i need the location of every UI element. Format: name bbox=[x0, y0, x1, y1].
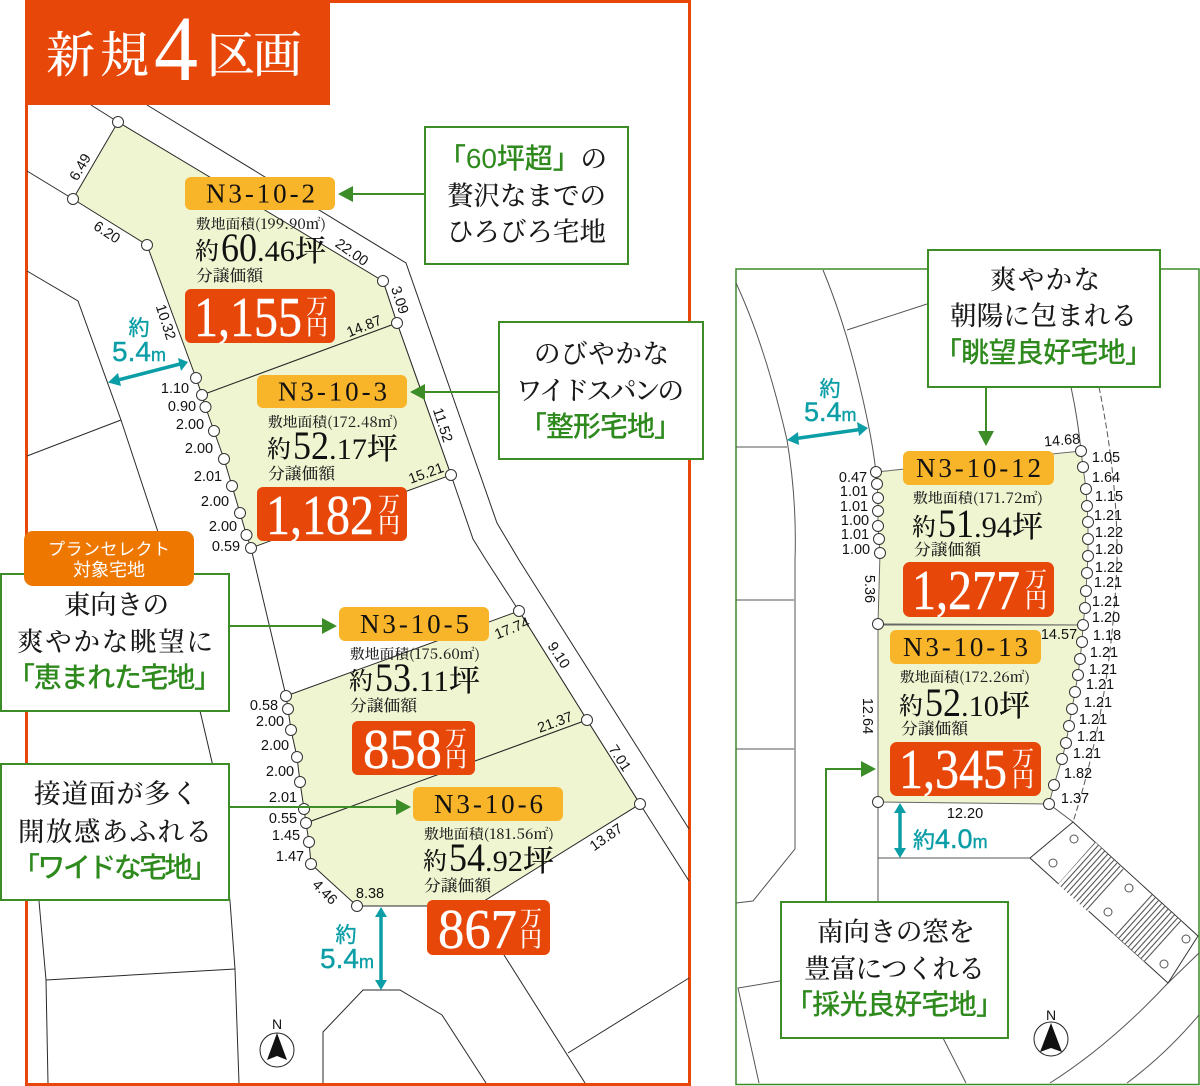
lot card: N3-10-3: 坪 bbox=[367, 424, 398, 468]
right map dimension labels: 1.00 bbox=[842, 542, 870, 558]
compass right bbox=[1034, 1007, 1068, 1056]
lot card: N3-10-6: 54 bbox=[449, 835, 485, 880]
left map dimension labels: 2.01 bbox=[269, 790, 297, 806]
right map dimension labels: 1.22 bbox=[1095, 525, 1123, 541]
panel: right site map frame bbox=[736, 269, 1199, 1084]
title banner bbox=[25, 0, 330, 105]
right map dimension labels: 1.21 bbox=[1094, 508, 1122, 524]
lot card: N3-10-13: 分譲価額 bbox=[901, 716, 969, 739]
lot card: N3-10-5: N3-10-5 bbox=[360, 609, 469, 639]
left map dimension labels: 1.47 bbox=[276, 849, 304, 865]
left map dimension labels: 2.00 bbox=[266, 764, 294, 780]
lot card: N3-10-3: 1,182 bbox=[266, 485, 374, 547]
right map dimension labels: 1.21 bbox=[1090, 645, 1118, 661]
callout: 恵まれた宅地: 東向きの bbox=[64, 583, 169, 622]
lot card: N3-10-13: N3-10-13 bbox=[903, 632, 1028, 662]
lot card: N3-10-13: 52 bbox=[925, 680, 961, 725]
right map dimension labels: 14.68 bbox=[1043, 431, 1081, 451]
callout: ワイドな宅地: 「ワイドな宅地」 bbox=[12, 852, 218, 883]
lot card: N3-10-3: .17 bbox=[329, 433, 367, 466]
lot card: N3-10-6: 約 bbox=[423, 841, 447, 876]
callout: 眺望良好宅地: 「眺望良好宅地」 bbox=[934, 337, 1153, 368]
lot card: N3-10-2: 分譲価額 bbox=[196, 263, 264, 286]
lot card: N3-10-12: 坪 bbox=[1012, 502, 1043, 546]
lot card: N3-10-2 bbox=[185, 177, 335, 349]
lot card: N3-10-2: 1,155 bbox=[194, 287, 302, 349]
road width bottom right: 4.0m: 約4.0m bbox=[913, 824, 988, 854]
left map dimension labels: 6.20 bbox=[90, 218, 123, 247]
lot card: N3-10-6: .92 bbox=[485, 845, 523, 878]
left map dimension labels: 0.59 bbox=[212, 539, 240, 555]
lot card: N3-10-2: 約 bbox=[195, 231, 219, 266]
lot card: N3-10-6: N3-10-6 bbox=[434, 789, 543, 819]
right map dimension labels: 1.01 bbox=[840, 484, 868, 500]
right map dimension labels: 1.01 bbox=[840, 499, 868, 515]
callout: 採光良好宅地 bbox=[781, 761, 1008, 1038]
title banner: 新規 bbox=[46, 17, 149, 87]
callout: 採光良好宅地: 豊富につくれる bbox=[804, 947, 985, 986]
right map dimension labels: 1.21 bbox=[1089, 662, 1117, 678]
right map boundary markers bbox=[870, 446, 1094, 810]
lot card: N3-10-3: 敷地面積(172.48㎡) bbox=[268, 412, 398, 432]
lot card: N3-10-3: 分譲価額 bbox=[268, 461, 336, 484]
lot card: N3-10-5: 坪 bbox=[449, 656, 480, 700]
lot card: N3-10-13: 敷地面積(172.26㎡) bbox=[900, 667, 1030, 687]
compass right: N bbox=[1046, 1007, 1056, 1023]
left map dimension labels: 2.00 bbox=[256, 714, 284, 730]
badge: プランセレクト対象宅地: プランセレクト bbox=[48, 540, 170, 559]
lot card: N3-10-13: 万 bbox=[1012, 742, 1034, 773]
callout: 60坪超: ひろびろ宅地 bbox=[447, 210, 606, 249]
lot card: N3-10-2: 円 bbox=[306, 311, 328, 342]
left map dimension labels: 21.37 bbox=[536, 709, 575, 737]
road width right: 5.4m bbox=[787, 378, 868, 445]
lot card: N3-10-2: .46 bbox=[257, 235, 295, 268]
left map dimension labels: 3.09 bbox=[387, 284, 411, 316]
left map dimension labels: 2.00 bbox=[185, 441, 213, 457]
callout: ワイドな宅地 bbox=[1, 764, 411, 900]
callout: 採光良好宅地: 南向きの窓を bbox=[817, 910, 975, 949]
panel: left site map frame bbox=[26, 2, 690, 1084]
badge: プランセレクト対象宅地: 対象宅地 bbox=[73, 560, 145, 580]
callout: 60坪超: 贅沢なまでの bbox=[447, 174, 606, 213]
right map dimension labels: 12.20 bbox=[947, 806, 983, 822]
lot card: N3-10-5: 約 bbox=[349, 661, 373, 696]
lot card: N3-10-12: 分譲価額 bbox=[914, 537, 982, 560]
lot card: N3-10-13: 円 bbox=[1012, 763, 1034, 794]
road width left: 5.4m: 約 bbox=[128, 317, 150, 340]
lot card: N3-10-2: 60 bbox=[221, 225, 257, 270]
left map dimension labels: 2.01 bbox=[194, 469, 222, 485]
callout: 60坪超: 「60坪超」の bbox=[438, 137, 607, 176]
lot card: N3-10-6 bbox=[413, 787, 563, 961]
left map dimension labels: 1.10 bbox=[161, 381, 189, 397]
left map dimension labels: 8.38 bbox=[356, 886, 384, 902]
right map dimension labels: 0.47 bbox=[839, 470, 867, 486]
lot card: N3-10-3: 約 bbox=[267, 429, 291, 464]
right map dimension labels: 1.01 bbox=[841, 527, 869, 543]
callout: 60坪超 bbox=[338, 127, 628, 264]
right map road and parcel lines bbox=[736, 270, 1199, 1083]
callout: 眺望良好宅地 bbox=[928, 250, 1160, 446]
left map dimension labels: 2.00 bbox=[176, 417, 204, 433]
road width bottom: 5.4m: 5.4m bbox=[320, 943, 374, 974]
lot card: N3-10-12: .94 bbox=[974, 511, 1012, 544]
right map dimension labels: 1.22 bbox=[1095, 560, 1123, 576]
lot card: N3-10-12: 51 bbox=[938, 501, 974, 546]
left map dimension labels: 2.00 bbox=[209, 519, 237, 535]
right map dimension labels: 1.21 bbox=[1073, 746, 1101, 762]
title banner: 区画 bbox=[206, 17, 302, 87]
left map dimension labels: 15.21 bbox=[407, 460, 446, 488]
road width left: 5.4m bbox=[108, 317, 188, 386]
left map dimension labels: 7.01 bbox=[605, 742, 634, 775]
left map dimension labels: 22.00 bbox=[332, 236, 371, 270]
left map dimension labels: 2.00 bbox=[261, 738, 289, 754]
callout: ワイドな宅地: 接道面が多く bbox=[34, 772, 198, 811]
lot card: N3-10-2: 坪 bbox=[295, 226, 326, 270]
right map dimension labels: 1.20 bbox=[1092, 610, 1120, 626]
lot card: N3-10-13 bbox=[890, 630, 1041, 801]
left map dimension labels: 6.49 bbox=[67, 151, 95, 184]
lot card: N3-10-12: N3-10-12 bbox=[916, 453, 1041, 483]
callout: 整形宅地: 「整形宅地」 bbox=[519, 411, 682, 442]
lot card: N3-10-5: 万 bbox=[445, 722, 467, 753]
lot card: N3-10-3: N3-10-3 bbox=[278, 376, 387, 406]
lot card: N3-10-6: 円 bbox=[520, 923, 542, 954]
lot card: N3-10-12: 円 bbox=[1025, 584, 1047, 615]
left map lot shapes bbox=[73, 122, 640, 906]
right map dimension labels: 5.36 bbox=[861, 575, 877, 603]
road width bottom: 5.4m: 約 bbox=[336, 924, 356, 947]
compass left bbox=[260, 1016, 294, 1067]
lot card: N3-10-3 bbox=[257, 375, 407, 547]
road width left: 5.4m: 5.4m bbox=[112, 336, 166, 367]
left map boundary markers bbox=[68, 116, 646, 912]
right map lot shapes bbox=[876, 451, 1088, 804]
road width bottom right: 4.0m bbox=[894, 803, 988, 858]
lot card: N3-10-12: 敷地面積(171.72㎡) bbox=[913, 488, 1043, 508]
left map dimension labels bbox=[67, 151, 634, 908]
right map dimension labels: 1.21 bbox=[1084, 695, 1112, 711]
badge: プランセレクト対象宅地 bbox=[24, 531, 194, 586]
lot card: N3-10-13: 坪 bbox=[999, 681, 1030, 725]
lot card: N3-10-5: 円 bbox=[445, 743, 467, 774]
lot card: N3-10-5: 858 bbox=[363, 719, 442, 781]
left map dimension labels: 0.90 bbox=[168, 399, 196, 415]
lot card: N3-10-12: 約 bbox=[912, 507, 936, 542]
callout: 整形宅地: ワイドスパンの bbox=[516, 369, 684, 408]
right map dimension labels: 1.18 bbox=[1093, 628, 1121, 644]
left map dimension labels: 0.58 bbox=[250, 698, 278, 714]
lot card: N3-10-3: 万 bbox=[378, 488, 400, 519]
callout: 眺望良好宅地: 朝陽に包まれる bbox=[950, 294, 1137, 333]
callout: 恵まれた宅地: 爽やかな眺望に bbox=[17, 620, 213, 659]
callout: 眺望良好宅地: 爽やかな bbox=[990, 258, 1100, 297]
callout: 整形宅地: のびやかな bbox=[534, 332, 669, 371]
right map dimension labels: 1.15 bbox=[1095, 489, 1123, 505]
right map dimension labels: 1.21 bbox=[1077, 729, 1105, 745]
lot card: N3-10-2: 万 bbox=[306, 290, 328, 321]
right map dimension labels: 12.64 bbox=[859, 698, 875, 734]
right map dimension labels: 1.82 bbox=[1064, 766, 1092, 782]
right map dimension labels: 1.64 bbox=[1092, 470, 1120, 486]
left map dimension labels: 13.87 bbox=[587, 821, 626, 855]
crosswalk bbox=[1030, 822, 1198, 983]
right map dimension labels: 14.57 bbox=[1041, 627, 1077, 643]
callout: ワイドな宅地: 開放感あふれる bbox=[18, 810, 212, 849]
lot card: N3-10-6: 敷地面積(181.56㎡) bbox=[424, 824, 554, 844]
lot card: N3-10-6: 坪 bbox=[523, 836, 554, 880]
lot card: N3-10-5: 53 bbox=[375, 655, 411, 700]
callout: 整形宅地 bbox=[410, 322, 703, 459]
right map dimension labels: 1.20 bbox=[1095, 542, 1123, 558]
lot card: N3-10-13: .10 bbox=[961, 690, 999, 723]
lot card: N3-10-2: N3-10-2 bbox=[206, 178, 315, 208]
left map dimension labels: 2.00 bbox=[201, 494, 229, 510]
left map dimension labels: 10.32 bbox=[152, 303, 178, 342]
left map dimension labels: 11.52 bbox=[429, 406, 455, 445]
right map dimension labels: 1.21 bbox=[1079, 712, 1107, 728]
lot card: N3-10-6: 万 bbox=[520, 902, 542, 933]
lot card: N3-10-5: 敷地面積(175.60㎡) bbox=[350, 644, 480, 664]
lot card: N3-10-12 bbox=[903, 451, 1054, 622]
right map dimension labels bbox=[839, 431, 1123, 822]
right map dimension labels: 1.05 bbox=[1092, 450, 1120, 466]
left map road and neighbouring parcel lines bbox=[27, 105, 689, 1083]
compass left: N bbox=[272, 1016, 282, 1032]
right map dimension labels: 1.37 bbox=[1061, 791, 1089, 807]
lot card: N3-10-5 bbox=[339, 607, 489, 781]
right map dimension labels: 1.21 bbox=[1094, 575, 1122, 591]
left map dimension labels: 4.46 bbox=[309, 877, 340, 908]
lot card: N3-10-2: 敷地面積(199.90㎡) bbox=[196, 214, 326, 234]
right map dimension labels: 1.21 bbox=[1092, 594, 1120, 610]
left map dimension labels: 1.45 bbox=[272, 828, 300, 844]
callout: 恵まれた宅地: 「恵まれた宅地」 bbox=[7, 662, 222, 693]
right map dimension labels: 1.00 bbox=[841, 513, 869, 529]
title banner: 4 bbox=[154, 0, 198, 101]
lot card: N3-10-6: 分譲価額 bbox=[424, 873, 492, 896]
left map dimension labels: 0.55 bbox=[269, 811, 297, 827]
lot card: N3-10-3: 円 bbox=[378, 509, 400, 540]
left map dimension labels: 14.87 bbox=[345, 313, 384, 341]
left map dimension labels: 9.10 bbox=[544, 639, 573, 672]
lot card: N3-10-5: .11 bbox=[411, 665, 449, 698]
right map dimension labels: 1.21 bbox=[1086, 677, 1114, 693]
road width bottom: 5.4m bbox=[320, 907, 387, 990]
lot card: N3-10-12: 万 bbox=[1025, 563, 1047, 594]
callout: 恵まれた宅地 bbox=[1, 574, 337, 711]
lot card: N3-10-6: 867 bbox=[438, 899, 517, 961]
lot card: N3-10-13: 約 bbox=[899, 686, 923, 721]
callout: 採光良好宅地: 「採光良好宅地」 bbox=[785, 989, 1004, 1020]
road width right: 5.4m: 5.4m bbox=[804, 397, 857, 427]
lot card: N3-10-3: 52 bbox=[293, 423, 329, 468]
lot card: N3-10-5: 分譲価額 bbox=[350, 693, 418, 716]
left map dimension labels: 17.74 bbox=[493, 615, 532, 643]
lot card: N3-10-12: 1,277 bbox=[912, 560, 1020, 622]
road width right: 5.4m: 約 bbox=[820, 378, 840, 401]
lot card: N3-10-13: 1,345 bbox=[899, 739, 1007, 801]
